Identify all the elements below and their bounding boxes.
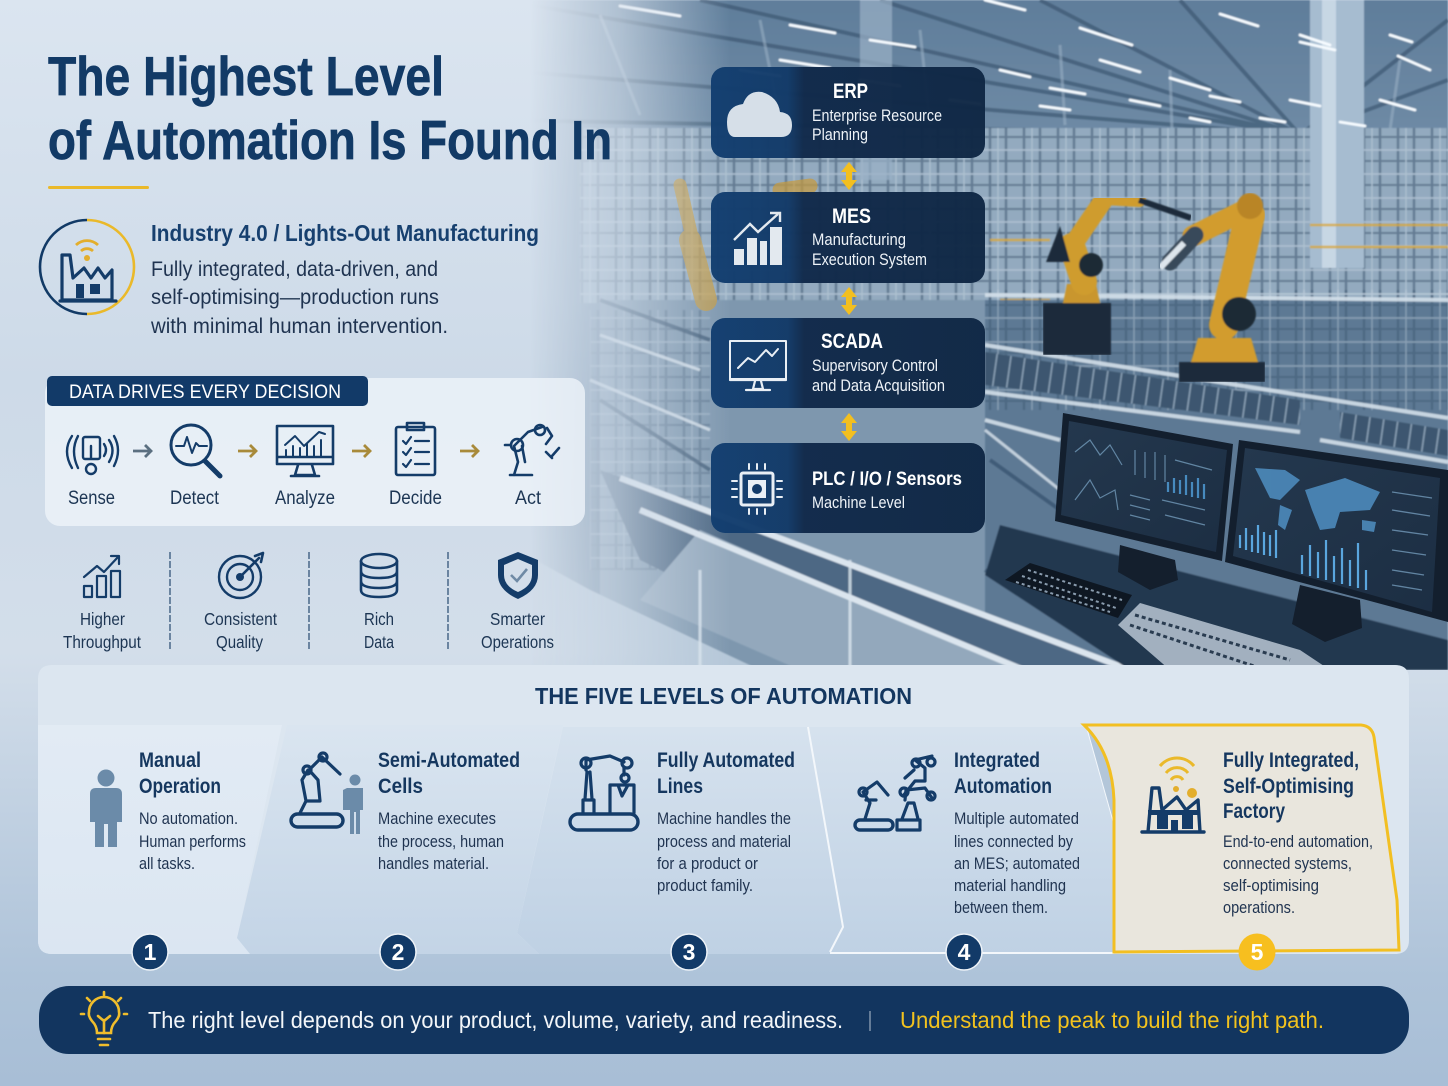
level 4 card: Multiple automated xyxy=(954,809,1079,828)
arrow xyxy=(352,445,370,457)
level 2 card: Semi-Automated xyxy=(378,749,520,772)
level 5 card highlighted: self-optimising xyxy=(1223,876,1319,895)
level number badges: 4 xyxy=(958,939,971,965)
system stack: MES: Manufacturing xyxy=(812,231,906,249)
system stack: SCADA: SCADA xyxy=(821,330,883,353)
level number badges: 2 xyxy=(392,939,404,965)
heading: THE FIVE LEVELS OF AUTOMATION xyxy=(535,683,912,709)
level 4 card: between them. xyxy=(954,898,1048,917)
title underline xyxy=(48,186,149,189)
level 2 card xyxy=(237,725,563,954)
level 2 card: Cells xyxy=(378,775,423,798)
level 1 card: Operation xyxy=(139,775,221,798)
icon: detect xyxy=(171,425,220,476)
icon: robot and human xyxy=(291,753,363,834)
arrow: MES to SCADA xyxy=(841,287,857,315)
level 3 card: for a product or xyxy=(657,854,758,873)
system stack: SCADA xyxy=(711,318,985,408)
process labels: Sense xyxy=(68,488,115,509)
benefit: smarter operations: Smarter xyxy=(490,609,545,629)
level 5 card highlighted xyxy=(1084,725,1399,952)
level number badges: 5 xyxy=(1251,939,1264,965)
benefit: higher throughput xyxy=(63,556,141,652)
level 5 card highlighted: Self-Optimising xyxy=(1223,775,1354,798)
system stack: MES: Execution System xyxy=(812,251,927,269)
system stack: PLC: PLC / I/O / Sensors xyxy=(812,469,962,490)
level 1 card: all tasks. xyxy=(139,854,195,873)
system stack: SCADA: Supervisory Control xyxy=(812,357,938,375)
arrow xyxy=(238,445,256,457)
icon: person xyxy=(90,770,122,847)
system stack: PLC: Machine Level xyxy=(812,494,905,512)
robot arm 2 xyxy=(1160,193,1265,382)
icon: connected robots xyxy=(855,756,935,830)
title xyxy=(48,45,612,171)
level 4 card: material handling xyxy=(954,876,1066,895)
system stack: ERP: ERP xyxy=(833,80,868,103)
level 3 card: process and material xyxy=(657,832,791,851)
benefit: rich data: Data xyxy=(364,632,394,652)
process labels: Decide xyxy=(389,488,442,509)
keyboards xyxy=(1005,563,1330,670)
system stack: SCADA: and Data Acquisition xyxy=(812,377,945,395)
level 2 card: Machine executes xyxy=(378,809,496,828)
process labels: Act xyxy=(515,488,542,509)
title: The Highest Level xyxy=(48,45,444,107)
subtitle: Industry 4.0 / Lights-Out Manufacturing xyxy=(151,220,539,246)
level 3 card: Lines xyxy=(657,775,703,798)
arrow: SCADA to PLC xyxy=(841,413,857,441)
process labels xyxy=(68,488,542,509)
icon: act xyxy=(505,425,559,475)
dashed dividers xyxy=(170,552,448,650)
arrow xyxy=(460,445,478,457)
arrow xyxy=(133,445,151,457)
benefit: smarter operations xyxy=(481,552,554,652)
level 4 card xyxy=(808,727,1124,954)
system stack: ERP xyxy=(711,67,985,158)
level 4 card: an MES; automated xyxy=(954,854,1080,873)
icon: smart factory xyxy=(1142,758,1204,832)
level 5 card highlighted: End-to-end automation, xyxy=(1223,832,1373,851)
icon: robot line xyxy=(570,756,638,830)
level 4 card: Automation xyxy=(954,775,1052,798)
level 2 card: the process, human xyxy=(378,832,504,851)
level 3 card: Machine handles the xyxy=(657,809,791,828)
faded robot behind panels xyxy=(680,185,810,300)
panel: data drives every decision xyxy=(45,376,585,526)
robot arm 1 xyxy=(1043,198,1191,355)
heading tab xyxy=(47,376,368,406)
arrow: ERP to MES xyxy=(841,162,857,190)
system stack: MES xyxy=(711,192,985,283)
level 3 card: product family. xyxy=(657,876,753,895)
level number badges xyxy=(132,934,1276,970)
icon: sense xyxy=(67,436,118,474)
title: of Automation Is Found In xyxy=(48,109,612,171)
level 4 card: Integrated xyxy=(954,749,1040,772)
level 2 card: handles material. xyxy=(378,854,489,873)
level 5 card highlighted: operations. xyxy=(1223,898,1295,917)
system stack: ERP: Enterprise Resource xyxy=(812,107,942,125)
level 5 card highlighted: Factory xyxy=(1223,800,1285,823)
description text: Fully integrated, data-driven, and xyxy=(151,257,438,281)
system stack: MES: MES xyxy=(832,205,871,228)
level number badges: 1 xyxy=(144,939,157,965)
footer banner xyxy=(39,986,1409,1054)
icon: analyze xyxy=(277,426,333,476)
system stack: PLC xyxy=(711,443,985,533)
benefit: higher throughput: Higher xyxy=(80,609,125,629)
benefit: consistent quality xyxy=(204,553,277,652)
level 3 card: Fully Automated xyxy=(657,749,795,772)
level 1 card: Human performs xyxy=(139,832,246,851)
icon: light bulb xyxy=(81,992,127,1045)
icon: decide xyxy=(396,423,435,475)
footer banner: Understand the peak to build the right path. xyxy=(900,1007,1324,1033)
description text: self-optimising—production runs xyxy=(151,285,439,309)
benefit: smarter operations: Operations xyxy=(481,632,554,652)
description text: with minimal human intervention. xyxy=(150,314,448,338)
level 5 card highlighted: connected systems, xyxy=(1223,854,1352,873)
monitor left xyxy=(1055,413,1233,590)
benefit: higher throughput: Throughput xyxy=(63,632,141,652)
icon: smart factory badge xyxy=(40,220,134,314)
level 3 card xyxy=(517,727,843,954)
footer banner: The right level depends on your product, volume, variety, and readiness. xyxy=(148,1007,843,1033)
panel: five levels of automation xyxy=(38,665,1409,970)
level 1 card: Manual xyxy=(139,749,201,772)
benefit: consistent quality: Quality xyxy=(216,632,263,652)
system stack: ERP: Planning xyxy=(812,126,868,144)
level number badges: 3 xyxy=(683,939,695,965)
monitor right xyxy=(1225,440,1448,642)
factory photo scene xyxy=(480,0,1448,670)
level 4 card: lines connected by xyxy=(954,832,1073,851)
level 1 card xyxy=(38,725,282,954)
heading tab: DATA DRIVES EVERY DECISION xyxy=(69,381,341,403)
level 1 card: No automation. xyxy=(139,809,238,828)
benefit: consistent quality: Consistent xyxy=(204,609,277,629)
process labels: Detect xyxy=(170,488,220,509)
benefit: rich data xyxy=(361,554,397,652)
benefit: rich data: Rich xyxy=(364,609,394,629)
process labels: Analyze xyxy=(275,488,335,509)
description text xyxy=(150,257,448,338)
level 5 card highlighted: Fully Integrated, xyxy=(1223,749,1359,772)
